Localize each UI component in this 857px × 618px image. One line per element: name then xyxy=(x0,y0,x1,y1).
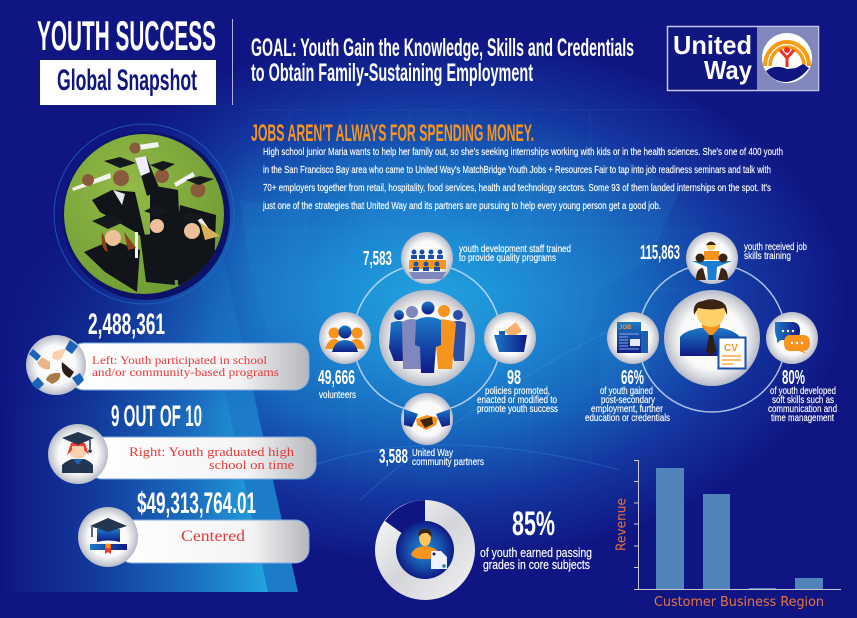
stat: passing grades xyxy=(480,505,592,572)
label: policies xyxy=(477,367,558,415)
panel: community cluster xyxy=(318,232,571,468)
label: policies: promote youth success xyxy=(477,403,558,415)
label: soft skills: of youth developed xyxy=(770,385,836,397)
stat: participated: Left: Youth participated in school xyxy=(92,353,268,367)
donut chart: 85% xyxy=(375,500,475,600)
icon: audience xyxy=(401,232,453,284)
label: staff: 7,583 xyxy=(363,248,392,270)
label: post-secondary: education or credentials xyxy=(585,412,670,424)
label: job skills: youth received job xyxy=(744,241,807,253)
subtitle box xyxy=(40,60,216,105)
subtitle box: Global Snapshot xyxy=(57,64,197,97)
label: post-secondary: employment, further xyxy=(591,403,663,415)
label: job skills xyxy=(640,241,807,264)
stat: graduated: 9 OUT OF 10 xyxy=(111,400,202,433)
axis label: customer business region: Customer Business Region xyxy=(654,595,824,610)
icon: speech bubbles xyxy=(766,312,818,364)
stat: graduated: Right: Youth graduated high xyxy=(129,445,295,459)
icon: joined hands xyxy=(26,335,86,395)
article body xyxy=(262,146,783,212)
goal heading xyxy=(251,34,634,87)
label: soft skills: communication and xyxy=(768,403,837,415)
infographic canvas: YOUTH SUCCESS xyxy=(37,12,216,59)
label: post-secondary: of youth gained xyxy=(600,385,653,397)
stat: participated: and/or community-based programs xyxy=(92,365,279,379)
label: job skills: skills training xyxy=(744,250,791,262)
label: job skills: 115,863 xyxy=(640,242,680,264)
logo: United Way xyxy=(668,26,818,90)
stat: amount: Centered xyxy=(181,528,245,545)
icon: newspaper xyxy=(607,312,659,364)
label: partners: 3,588 xyxy=(379,446,408,468)
icon: newspaper: JOB xyxy=(619,325,632,331)
stat: graduated: school on time xyxy=(209,458,295,472)
icon: handshake xyxy=(401,393,453,445)
stat: passing grades: 85% xyxy=(512,505,555,543)
axis label: revenue: Revenue xyxy=(614,498,630,551)
label: partners xyxy=(379,446,484,468)
label: policies: enacted or modified to xyxy=(477,394,557,406)
label: volunteers xyxy=(318,367,356,401)
label: partners: United Way xyxy=(412,447,454,459)
label: volunteers: 49,666 xyxy=(318,367,355,389)
label: staff xyxy=(363,243,571,270)
stat: amount xyxy=(78,487,309,567)
logo: United Way: United xyxy=(673,30,752,60)
label: soft skills: time management xyxy=(771,412,834,424)
label: staff: to provide quality programs xyxy=(459,252,556,264)
left diagonal panel xyxy=(20,268,298,592)
stat: graduated xyxy=(48,400,316,484)
goal heading: to Obtain Family-Sustaining Employment xyxy=(251,59,533,87)
label: post-secondary: post-secondary xyxy=(601,394,656,406)
label: partners: community partners xyxy=(412,456,484,468)
label: soft skills: 80% xyxy=(782,367,805,389)
panel: employment cluster xyxy=(585,232,837,424)
label: volunteers: volunteers xyxy=(319,389,356,401)
photo: graduates xyxy=(54,124,234,304)
article heading: JOBS AREN'T ALWAYS FOR SPENDING MONEY. xyxy=(251,120,534,147)
icon: crowd of people xyxy=(379,290,475,386)
stat: participated xyxy=(26,308,309,395)
label: staff: youth development staff trained xyxy=(459,243,571,255)
icon: training xyxy=(686,232,738,284)
icon: job seeker with CV xyxy=(664,290,760,386)
label: soft skills xyxy=(768,367,837,424)
label: post-secondary xyxy=(585,367,670,424)
icon: cap and diploma xyxy=(78,507,138,567)
label: post-secondary: 66% xyxy=(621,367,644,389)
label: soft skills: soft skills such as xyxy=(772,394,834,406)
bar chart xyxy=(614,460,841,610)
stat: participated: 2,488,361 xyxy=(88,308,165,341)
stat: passing grades: grades in core subjects xyxy=(483,557,590,572)
icon: graduate xyxy=(48,424,108,484)
icon: job seeker with CV: CV xyxy=(724,343,738,354)
stat: passing grades: of youth earned passing xyxy=(480,545,592,560)
icon: folder xyxy=(484,312,536,364)
stat: amount: $49,313,764.01 xyxy=(137,487,256,520)
label: policies: 98 xyxy=(507,367,521,389)
logo: United Way: Way xyxy=(704,55,752,85)
icon: volunteers xyxy=(319,312,371,364)
article body: just one of the strategies that United Way and its partners are pursuing to help every young person get a good job. xyxy=(262,200,661,212)
label: policies: policies promoted, xyxy=(485,385,550,397)
